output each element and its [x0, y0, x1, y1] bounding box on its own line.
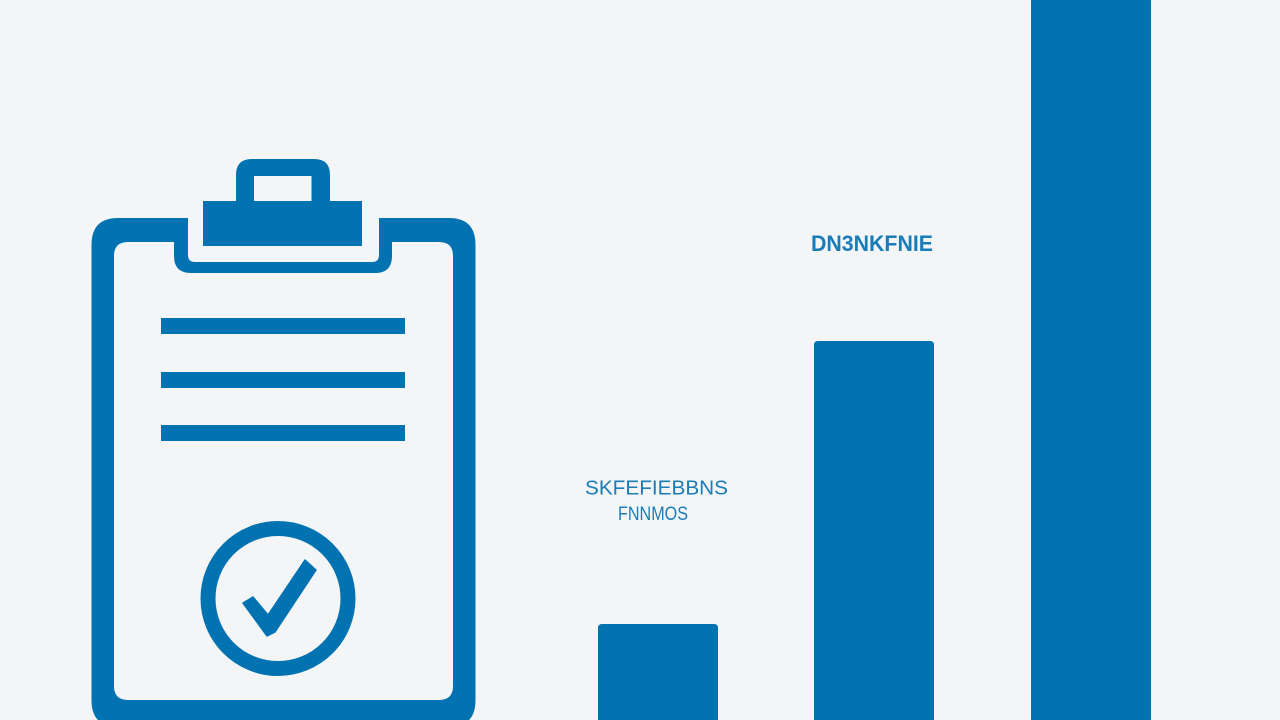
bar 1 — [598, 624, 718, 720]
clipboard clip — [203, 159, 362, 246]
bar 1 label — [585, 478, 728, 525]
bar 1 label: SKFEFIEBBNS — [585, 478, 728, 500]
icon: check mark in circle — [208, 528, 348, 668]
bar 3 — [1031, 0, 1151, 720]
clipboard board outline — [92, 218, 476, 720]
bar chart — [585, 0, 1151, 720]
checklist lines — [161, 318, 405, 441]
icon: clipboard — [92, 159, 476, 720]
bar 2 — [814, 341, 934, 720]
bar 2 label: DN3NKFNIE — [811, 231, 933, 256]
bar 1 label: FNNMOS — [618, 504, 688, 525]
